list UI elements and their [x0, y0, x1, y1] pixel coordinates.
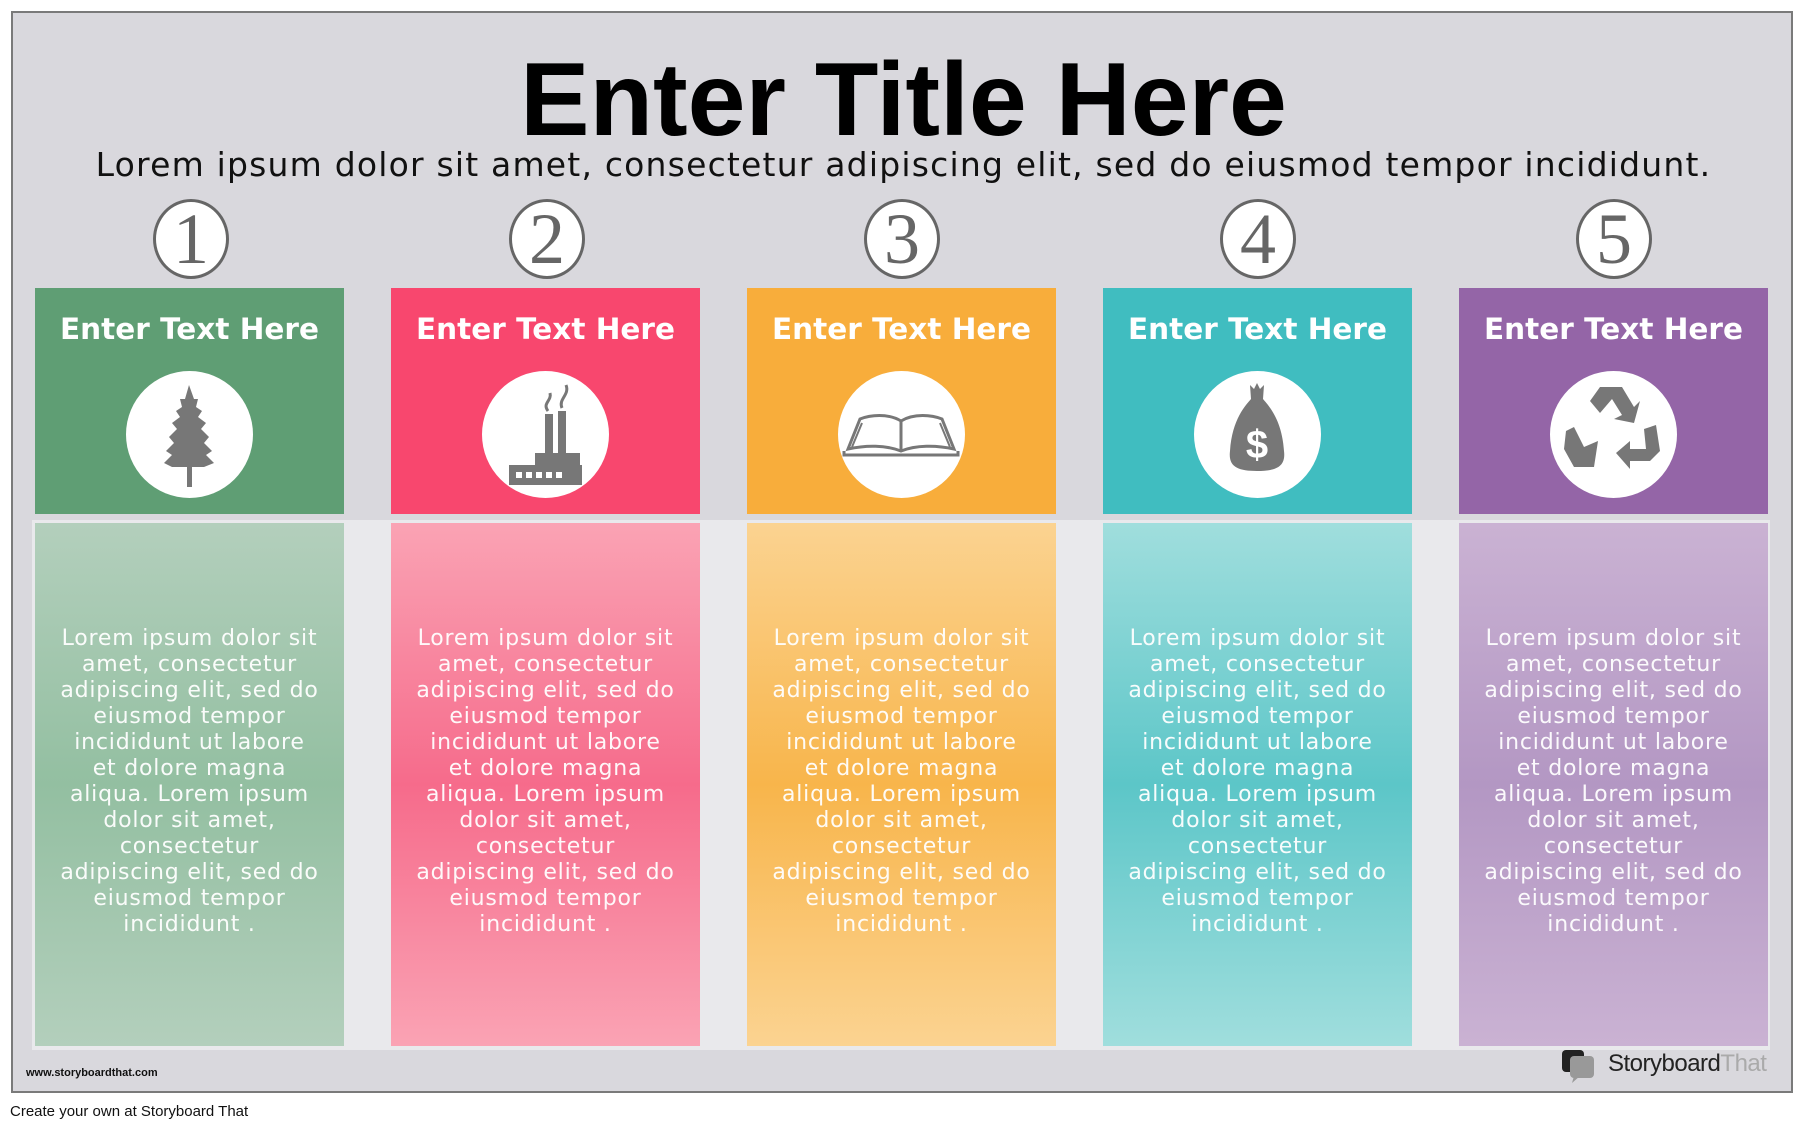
- panel 4 body: aliqua. Lorem ipsum: [1138, 782, 1377, 807]
- panel 1 header: Enter Text Here: [60, 312, 319, 346]
- panel 2 header: [391, 288, 700, 514]
- number 2: [509, 199, 585, 279]
- panel 4 body: Lorem ipsum dolor sit: [1130, 626, 1385, 651]
- panel 4 body: incididunt .: [1191, 912, 1324, 937]
- panel 4 body: adipiscing elit, sed do: [1128, 860, 1387, 885]
- panel 1 body: eiusmod tempor: [93, 886, 286, 911]
- panel 4 body: et dolore magna: [1161, 756, 1354, 781]
- panel 1 body: Lorem ipsum dolor sit: [62, 626, 317, 651]
- number 1: [153, 199, 229, 279]
- number 4: [1220, 199, 1296, 279]
- panel 3 body: [747, 523, 1056, 1046]
- panel 2 body: eiusmod tempor: [449, 704, 642, 729]
- panel 2 body: [391, 523, 700, 1046]
- panel 2 body: consectetur: [476, 834, 615, 859]
- number 2: 2: [529, 199, 565, 279]
- panel 5 body: incididunt .: [1547, 912, 1680, 937]
- panel 2 body: dolor sit amet,: [459, 808, 632, 833]
- footer url: www.storyboardthat.com: [26, 1067, 158, 1079]
- panel 3 body: aliqua. Lorem ipsum: [782, 782, 1021, 807]
- title: Enter Title Here: [520, 42, 1287, 158]
- panel 1 body: [35, 523, 344, 1046]
- panel 1 body: eiusmod tempor: [93, 704, 286, 729]
- panel 5 body: consectetur: [1544, 834, 1683, 859]
- credit: Create your own at Storyboard That: [10, 1103, 248, 1120]
- panel 4 body: dolor sit amet,: [1171, 808, 1344, 833]
- panel 1 body: incididunt ut labore: [74, 730, 305, 755]
- number 5: 5: [1596, 199, 1632, 279]
- panel 3 body: eiusmod tempor: [805, 886, 998, 911]
- logo: StoryboardThat: [1608, 1050, 1766, 1077]
- panel 2 body: Lorem ipsum dolor sit: [418, 626, 673, 651]
- panel 3 body: dolor sit amet,: [815, 808, 988, 833]
- panel 3 body: adipiscing elit, sed do: [772, 678, 1031, 703]
- panel 2 body: aliqua. Lorem ipsum: [426, 782, 665, 807]
- icon: money bag: [1194, 371, 1321, 498]
- panel 3 body: et dolore magna: [805, 756, 998, 781]
- panel 2 body: adipiscing elit, sed do: [416, 678, 675, 703]
- panel 1 body: adipiscing elit, sed do: [60, 678, 319, 703]
- panel 4 body: incididunt ut labore: [1142, 730, 1373, 755]
- panel 1 body: consectetur: [120, 834, 259, 859]
- panel 1 body: incididunt .: [123, 912, 256, 937]
- number 3: 3: [884, 199, 920, 279]
- panel 3 body: consectetur: [832, 834, 971, 859]
- panel 2 body: incididunt ut labore: [430, 730, 661, 755]
- panel 3 body: incididunt ut labore: [786, 730, 1017, 755]
- panel 1 body: dolor sit amet,: [103, 808, 276, 833]
- panel 3 body: adipiscing elit, sed do: [772, 860, 1031, 885]
- icon: recycle: [1550, 371, 1677, 498]
- panel 5 header: Enter Text Here: [1484, 312, 1743, 346]
- panel 2 body: incididunt .: [479, 912, 612, 937]
- panel 4 body: [1103, 523, 1412, 1046]
- panel 2 body: amet, consectetur: [438, 652, 653, 677]
- panel 3 header: Enter Text Here: [772, 312, 1031, 346]
- panel 4 header: [1103, 288, 1412, 514]
- icon: book: [838, 371, 965, 498]
- panel 3 header: [747, 288, 1056, 514]
- panel 4 body: adipiscing elit, sed do: [1128, 678, 1387, 703]
- panel 5 body: eiusmod tempor: [1517, 886, 1710, 911]
- panel 5 body: et dolore magna: [1517, 756, 1710, 781]
- panel 3 body: incididunt .: [835, 912, 968, 937]
- panel 1 body: aliqua. Lorem ipsum: [70, 782, 309, 807]
- panel 5 body: dolor sit amet,: [1527, 808, 1700, 833]
- logo: [1562, 1050, 1767, 1083]
- icon: factory: [482, 371, 609, 498]
- panel 5 body: eiusmod tempor: [1517, 704, 1710, 729]
- panel 4 body: eiusmod tempor: [1161, 704, 1354, 729]
- panel 2 header: Enter Text Here: [416, 312, 675, 346]
- icon: tree: [126, 371, 253, 498]
- panel 1 body: adipiscing elit, sed do: [60, 860, 319, 885]
- panel 4 body: consectetur: [1188, 834, 1327, 859]
- panel 5 body: amet, consectetur: [1506, 652, 1721, 677]
- light band: [32, 520, 1770, 1050]
- panel 4 body: amet, consectetur: [1150, 652, 1365, 677]
- panel 3 body: Lorem ipsum dolor sit: [774, 626, 1029, 651]
- panel 2 body: adipiscing elit, sed do: [416, 860, 675, 885]
- panel 3 body: amet, consectetur: [794, 652, 1009, 677]
- panel 2 body: eiusmod tempor: [449, 886, 642, 911]
- panel 4 header: Enter Text Here: [1128, 312, 1387, 346]
- panel 2 body: et dolore magna: [449, 756, 642, 781]
- panel 1 header: [35, 288, 344, 514]
- panel 5 header: [1459, 288, 1768, 514]
- subtitle: Lorem ipsum dolor sit amet, consectetur adipiscing elit, sed do eiusmod tempor incididunt.: [96, 145, 1711, 184]
- panel 5 body: adipiscing elit, sed do: [1484, 860, 1743, 885]
- panel 1 body: et dolore magna: [93, 756, 286, 781]
- number 4: 4: [1240, 199, 1276, 279]
- panel 5 body: incididunt ut labore: [1498, 730, 1729, 755]
- number 1: 1: [173, 199, 209, 279]
- panel 5 body: aliqua. Lorem ipsum: [1494, 782, 1733, 807]
- panel 1 body: amet, consectetur: [82, 652, 297, 677]
- panel 3 body: eiusmod tempor: [805, 704, 998, 729]
- number 3: [864, 199, 940, 279]
- panel 5 body: adipiscing elit, sed do: [1484, 678, 1743, 703]
- panel 5 body: Lorem ipsum dolor sit: [1486, 626, 1741, 651]
- icon: money bag: $: [1246, 423, 1268, 467]
- panel 4 body: eiusmod tempor: [1161, 886, 1354, 911]
- panel 5 body: [1459, 523, 1768, 1046]
- number 5: [1576, 199, 1652, 279]
